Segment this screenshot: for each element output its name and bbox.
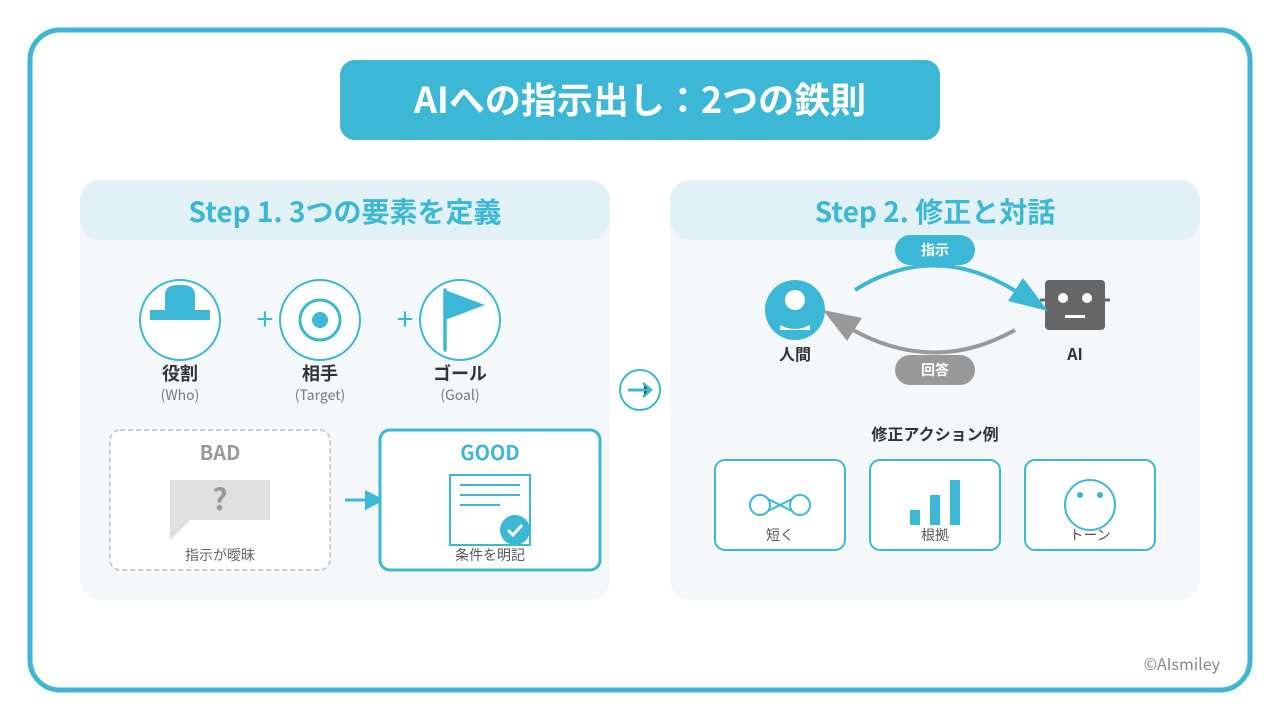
card: good: GOOD (460, 437, 520, 466)
icon: face (1065, 480, 1115, 530)
label: target: 相手 (302, 360, 338, 386)
icon: shorten (750, 495, 810, 515)
card: good: 条件を明記 (455, 545, 525, 565)
icon: target (280, 280, 360, 360)
pill: instruction (895, 235, 975, 265)
step 1 heading: Step 1. 3つの要素を定義 (188, 191, 502, 231)
label: human: 人間 (779, 341, 811, 365)
icon: speech bubble: ? (212, 475, 228, 519)
pill: instruction: 指示 (921, 240, 949, 260)
arrow: response (823, 310, 1015, 352)
plus sign: + (397, 295, 413, 339)
icon: human (765, 280, 825, 340)
label: goal: (Goal) (440, 385, 480, 405)
arrow: step 1 to step 2 (620, 370, 660, 410)
label: target (295, 360, 345, 405)
title: AIへの指示出し：2つの鉄則 (413, 72, 866, 124)
icon: bars (910, 480, 960, 525)
card: bad: BAD (200, 437, 240, 466)
label: role: 役割 (162, 360, 198, 386)
heading: correction examples: 修正アクション例 (871, 421, 999, 445)
card: shorter (715, 460, 845, 550)
pill: response: 回答 (921, 360, 949, 380)
label: target: (Target) (295, 385, 345, 405)
step 2 heading: Step 2. 修正と対話 (815, 191, 1055, 231)
label: goal (433, 360, 487, 405)
icon: document with check (450, 475, 530, 545)
plus sign: + (257, 295, 273, 339)
panel: step 1 (80, 180, 610, 600)
card: evidence: 根拠 (921, 525, 949, 545)
card: bad: 指示が曖昧 (185, 545, 255, 565)
card: tone: トーン (1069, 525, 1111, 545)
icon: goal flag (420, 280, 500, 360)
panel: step 2 (670, 180, 1200, 600)
step 2 heading (670, 180, 1200, 240)
icon: role hat (140, 280, 220, 360)
card: tone (1025, 460, 1155, 550)
arrow: bad to good (345, 490, 385, 510)
label: role (161, 360, 199, 405)
label: AI: AI (1066, 341, 1083, 365)
title (340, 60, 940, 140)
card: good (380, 430, 600, 570)
arrow: instruction (855, 265, 1048, 311)
card: shorter: 短く (766, 525, 794, 545)
label: goal: ゴール (433, 360, 487, 386)
copyright: ©AIsmiley (1144, 651, 1221, 675)
step 1 heading (80, 180, 610, 240)
card: evidence (870, 460, 1000, 550)
pill: response (895, 355, 975, 385)
icon: AI robot (1040, 280, 1110, 330)
icon: speech bubble (170, 475, 270, 540)
card: bad (110, 430, 330, 570)
label: role: (Who) (161, 385, 199, 405)
